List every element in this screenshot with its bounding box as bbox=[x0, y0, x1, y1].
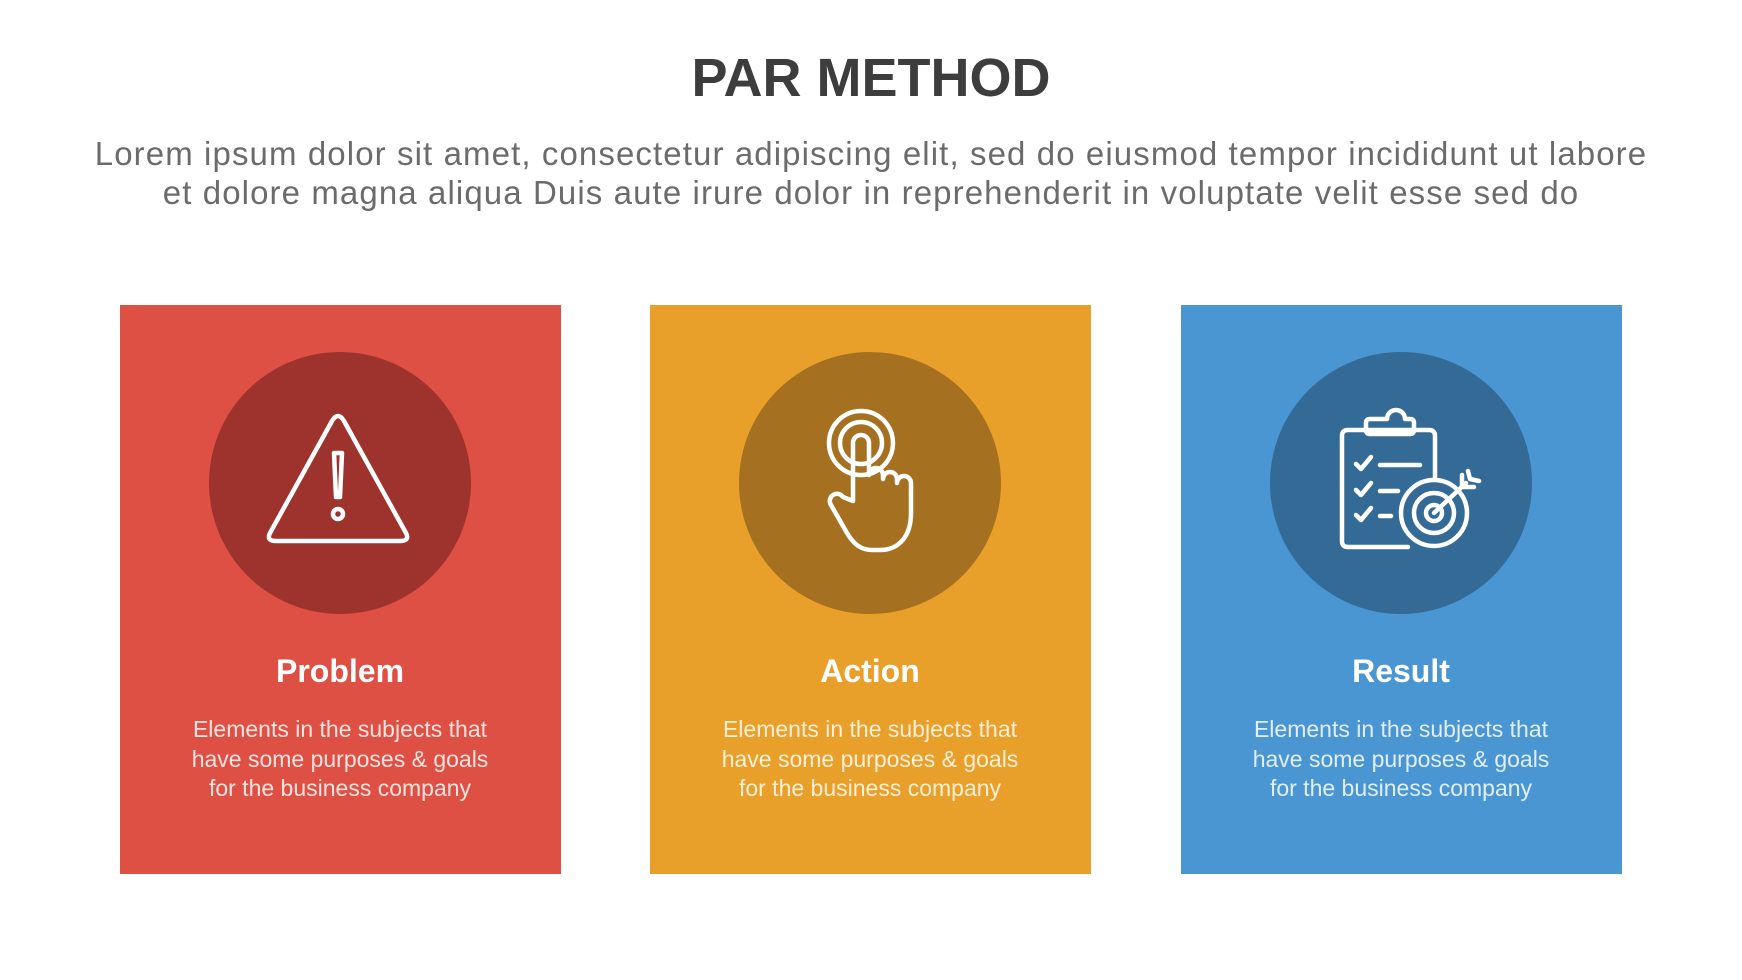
subtitle text: Lorem ipsum dolor sit amet, consectetur adipiscing elit, sed do eiusmod tempor incididunt ut labore bbox=[95, 135, 1647, 172]
icon circle: result bbox=[1270, 352, 1532, 614]
heading: problem: Problem bbox=[276, 653, 404, 689]
body text: result bbox=[1253, 716, 1549, 801]
panel: action bbox=[650, 305, 1091, 874]
body text: result: have some purposes & goals bbox=[1253, 746, 1549, 772]
body text: action: for the business company bbox=[739, 775, 1002, 801]
body text: action: have some purposes & goals bbox=[722, 746, 1018, 772]
subtitle text: et dolore magna aliqua Duis aute irure dolor in reprehenderit in voluptate velit esse sed do bbox=[163, 174, 1579, 211]
heading: result: Result bbox=[1352, 653, 1450, 689]
heading: action: Action bbox=[820, 653, 920, 689]
icon circle: problem bbox=[209, 352, 471, 614]
subtitle text bbox=[95, 135, 1647, 211]
icon: hand tap bbox=[829, 411, 911, 550]
panel: problem bbox=[120, 305, 561, 874]
body text: action: Elements in the subjects that bbox=[723, 716, 1018, 742]
body text: problem bbox=[192, 716, 488, 801]
icon: warning triangle bbox=[269, 416, 407, 541]
body text: result: for the business company bbox=[1270, 775, 1533, 801]
body text: problem: have some purposes & goals bbox=[192, 746, 488, 772]
icon: clipboard with target bbox=[1342, 410, 1479, 547]
title: PAR METHOD bbox=[692, 48, 1050, 108]
body text: result: Elements in the subjects that bbox=[1254, 716, 1549, 742]
icon circle: action bbox=[739, 352, 1001, 614]
body text: problem: Elements in the subjects that bbox=[193, 716, 488, 742]
body text: action bbox=[722, 716, 1018, 801]
panel: result bbox=[1181, 305, 1622, 874]
body text: problem: for the business company bbox=[209, 775, 472, 801]
